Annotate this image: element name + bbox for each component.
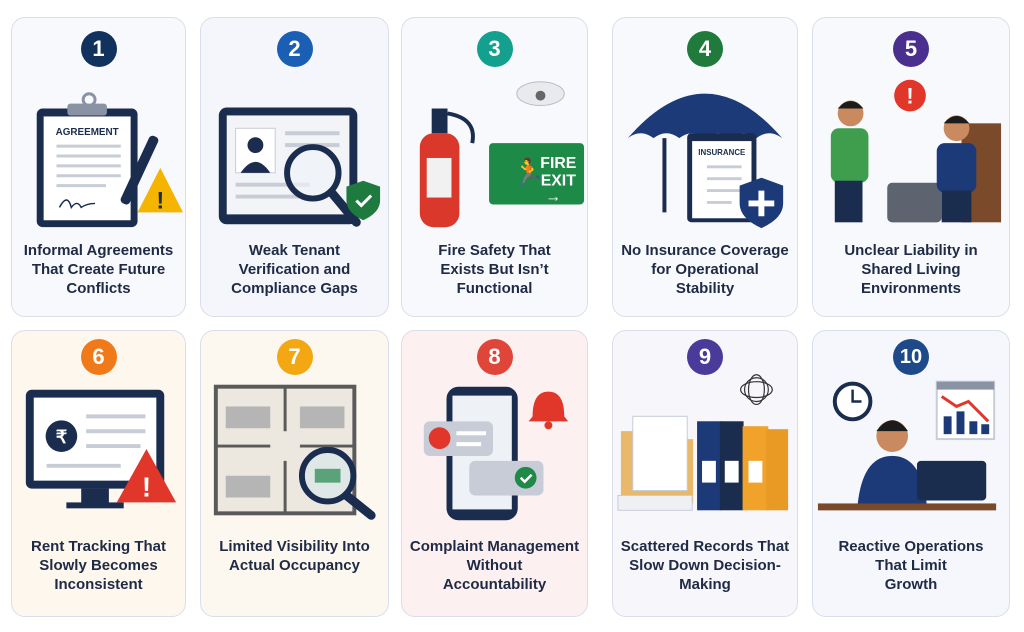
card 10 <box>812 330 1010 617</box>
icon: extinguisher and exit sign <box>420 81 584 228</box>
title 1 <box>24 242 173 297</box>
icon: agreement clipboard: ! <box>156 188 164 214</box>
badge 1: 1 <box>92 36 105 61</box>
title 3: Functional <box>457 280 532 297</box>
icon: stressed person with laptop and chart <box>818 380 996 510</box>
icon: agreement clipboard: AGREEMENT <box>56 127 119 138</box>
title 10: Reactive Operations <box>838 538 984 555</box>
card 8 <box>401 330 588 617</box>
title 1: Conflicts <box>66 280 131 297</box>
icon: extinguisher and exit sign: FIRE <box>540 155 576 172</box>
badge 2: 2 <box>288 36 301 61</box>
badge 10: 10 <box>900 346 922 368</box>
title 5: Unclear Liability in <box>844 242 978 259</box>
title 7 <box>219 538 370 574</box>
title 3 <box>438 242 551 297</box>
title 4: for Operational <box>651 261 759 278</box>
title 7: Limited Visibility Into <box>219 538 370 555</box>
badge 8 <box>476 339 512 375</box>
icon: extinguisher and exit sign: 🏃 <box>513 157 545 187</box>
card 6 <box>11 330 186 617</box>
card 1 <box>11 17 186 317</box>
title 1: Informal Agreements <box>24 242 173 259</box>
title 6: Slowly Becomes <box>39 557 158 574</box>
title 2: Weak Tenant <box>249 242 340 259</box>
badge 10 <box>893 339 929 375</box>
title 8: Without <box>467 557 522 574</box>
icon: scattered files and binders <box>618 374 788 511</box>
badge 4 <box>687 31 723 67</box>
card 3 <box>401 17 588 317</box>
badge 6 <box>80 339 116 375</box>
badge 5 <box>893 31 929 67</box>
icon: agreement clipboard <box>36 92 183 228</box>
icon: ID tablet with magnifier <box>218 108 380 227</box>
badge 8: 8 <box>488 344 501 369</box>
icon: monitor rupee warning: ! <box>142 471 151 502</box>
title 1: That Create Future <box>32 261 165 278</box>
title 2: Compliance Gaps <box>231 280 358 297</box>
badge 3: 3 <box>488 36 501 61</box>
card 9 <box>612 330 798 617</box>
badge 6: 6 <box>92 344 105 369</box>
title 3: Exists But Isn’t <box>440 261 549 278</box>
badge 7 <box>276 339 312 375</box>
icon: floor plan magnifier <box>214 384 376 520</box>
card 7 <box>200 330 389 617</box>
badge 5: 5 <box>905 36 917 61</box>
badge 4: 4 <box>699 36 711 61</box>
title 9: Making <box>679 576 731 593</box>
title 8: Accountability <box>443 576 546 593</box>
icon: two people arguing: ! <box>906 84 914 109</box>
title 9 <box>621 538 789 593</box>
icon: umbrella insurance: INSURANCE <box>698 148 745 157</box>
card 5 <box>812 17 1010 317</box>
title 9: Slow Down Decision- <box>629 557 781 574</box>
icon: extinguisher and exit sign: EXIT <box>541 173 576 190</box>
title 2 <box>231 242 358 297</box>
title 9: Scattered Records That <box>621 538 789 555</box>
title 5: Environments <box>861 280 961 297</box>
title 2: Verification and <box>239 261 350 278</box>
title 10: That Limit <box>875 557 947 574</box>
badge 9 <box>687 339 723 375</box>
icon: umbrella insurance <box>628 94 784 228</box>
icon: monitor rupee warning <box>26 390 176 508</box>
title 6: Rent Tracking That <box>31 538 166 555</box>
title 7: Actual Occupancy <box>229 557 360 574</box>
title 5 <box>844 242 978 297</box>
title 3: Fire Safety That <box>438 242 551 259</box>
title 4: No Insurance Coverage <box>621 242 789 259</box>
badge 2 <box>276 31 312 67</box>
icon: two people arguing <box>830 80 1002 222</box>
badge 9: 9 <box>699 344 711 369</box>
title 8 <box>410 538 579 593</box>
card 4 <box>612 17 798 317</box>
icon: extinguisher and exit sign: → <box>545 189 561 206</box>
title 4: Stability <box>676 280 734 297</box>
icon: phone complaint chat and bell <box>424 386 568 520</box>
badge 7: 7 <box>288 344 301 369</box>
badge 1 <box>80 31 116 67</box>
title 10: Growth <box>885 576 937 593</box>
title 8: Complaint Management <box>410 538 579 555</box>
icon: monitor rupee warning: ₹ <box>56 427 68 447</box>
title 5: Shared Living <box>861 261 961 278</box>
badge 3 <box>476 31 512 67</box>
title 10 <box>838 538 984 593</box>
title 6: Inconsistent <box>54 576 143 593</box>
title 6 <box>31 538 166 593</box>
card 2 <box>200 17 389 317</box>
title 4 <box>621 242 789 297</box>
